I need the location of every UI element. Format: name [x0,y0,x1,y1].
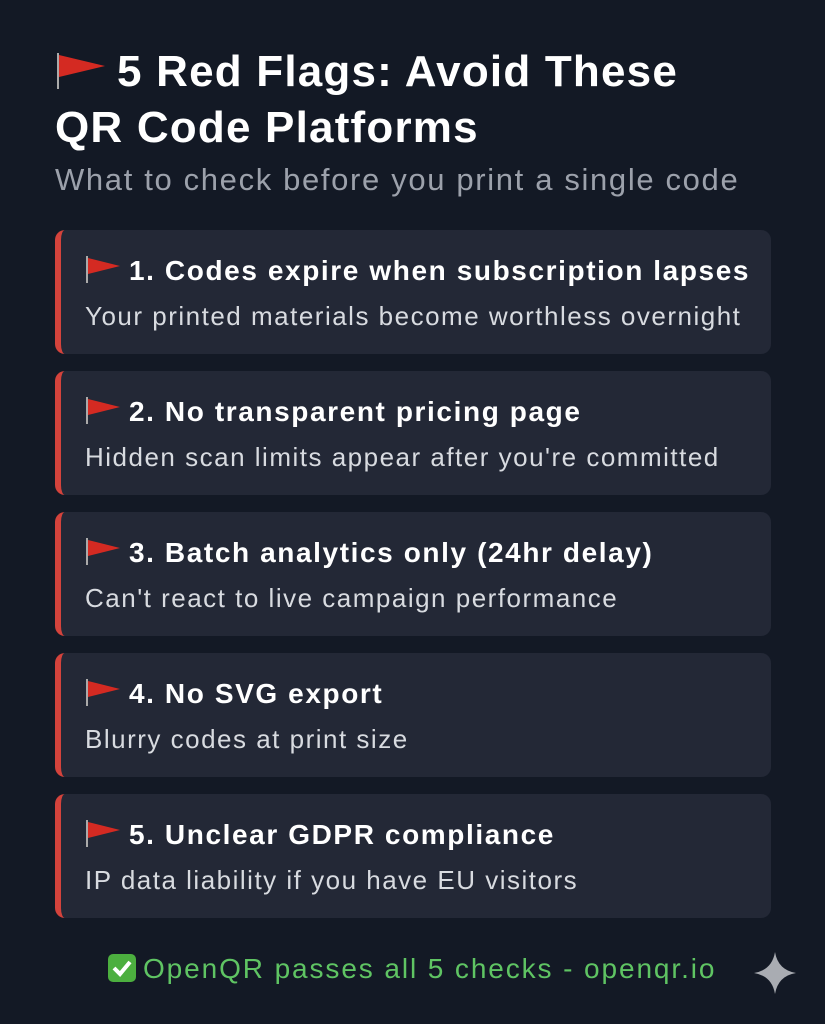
card 2 [55,371,771,495]
card 1: Your printed materials become worthless overnight [85,301,741,331]
card 2: Hidden scan limits appear after you're committed [85,442,720,472]
card 4: 4. No SVG export [129,678,383,709]
card 2: 2. No transparent pricing page [129,396,582,427]
subtitle: What to check before you print a single code [55,162,739,197]
card 5 [55,794,771,918]
card 1: 1. Codes expire when subscription lapses [129,255,750,286]
card 5: 5. Unclear GDPR compliance [129,819,555,850]
card 3: 3. Batch analytics only (24hr delay) [129,537,653,568]
title: QR Code Platforms [55,103,479,152]
card 5: IP data liability if you have EU visitors [85,865,578,895]
card 1 [55,230,771,354]
footer: OpenQR passes all 5 checks - openqr.io [143,953,716,984]
icon: sparkle [754,952,796,994]
title: 5 Red Flags: Avoid These [117,47,678,96]
card 4 [55,653,771,777]
card 4: Blurry codes at print size [85,724,409,754]
card 3: Can't react to live campaign performance [85,583,618,613]
card 3 [55,512,771,636]
title [55,47,678,152]
